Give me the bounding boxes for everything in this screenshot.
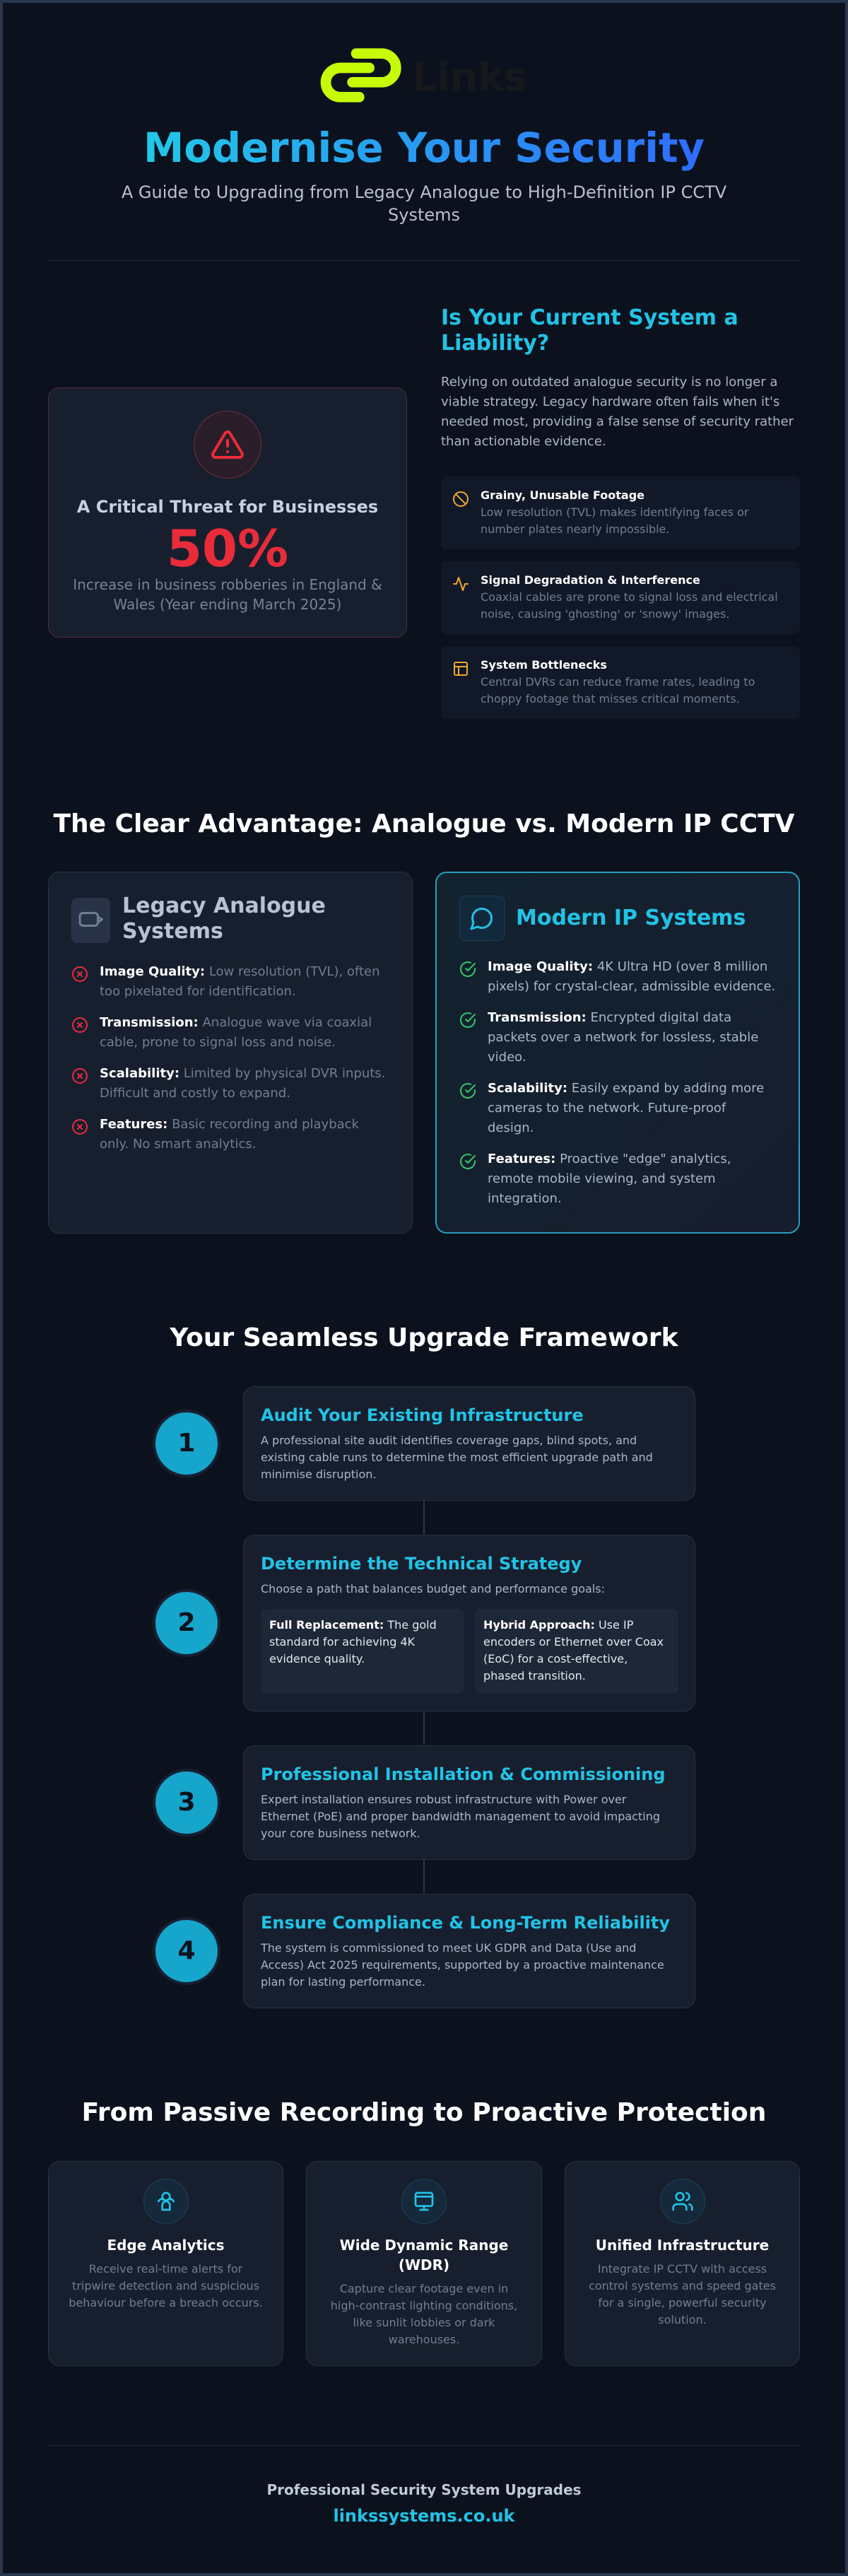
panel: unified infrastructure: control systems and speed gates: [589, 2279, 776, 2293]
option: hybrid approach: [475, 1609, 678, 1694]
panel: legacy analogue: [48, 872, 413, 1234]
title: Modernise Your Security: [143, 124, 705, 172]
panel: wide dynamic range: Wide Dynamic Range: [340, 2237, 508, 2254]
step 3 card: [243, 1745, 695, 1860]
panel: grainy footage: number plates nearly impossible.: [481, 522, 669, 536]
panel: signal degradation: noise, causing 'ghosting' or 'snowy' images.: [481, 607, 729, 621]
step 2 card: Determine the Technical Strategy: [261, 1554, 582, 1574]
step 1 card: minimise disruption.: [261, 1468, 376, 1481]
modern list: [459, 959, 775, 1206]
legacy list: too pixelated for identification.: [100, 984, 296, 999]
icon: modern camera: [459, 896, 505, 941]
step 3 card: Expert installation ensures robust infrastructure with Power over: [261, 1793, 626, 1806]
option: hybrid approach: encoders or Ethernet over Coax: [483, 1635, 664, 1649]
option: hybrid approach: (EoC) for a cost-effective,: [483, 1652, 628, 1665]
heading: liability: Liability?: [441, 331, 549, 356]
modern heading: Modern IP Systems: [516, 906, 746, 930]
panel: edge analytics: [48, 2161, 283, 2366]
modern list: Features: Proactive "edge" analytics,: [488, 1152, 731, 1166]
stat description: Increase in business robberies in England &: [73, 576, 382, 593]
panel: edge analytics: Edge Analytics: [107, 2237, 225, 2254]
panel: bottlenecks: Central DVRs can reduce frame rates, leading to: [481, 675, 755, 689]
step 4 number: 4: [177, 1936, 196, 1965]
option: full replacement: evidence quality.: [269, 1652, 365, 1665]
panel: unified infrastructure: solution.: [658, 2313, 707, 2326]
icon: chain link: [321, 48, 401, 103]
step 1 card: [243, 1386, 695, 1501]
logo: [321, 48, 401, 103]
logo wordmark: Links: [412, 54, 526, 100]
icon: ban: [453, 491, 469, 507]
step 2 number: 2: [177, 1608, 196, 1637]
panel: signal degradation: [441, 561, 800, 634]
step 2 number: [153, 1589, 220, 1657]
modern list: video.: [488, 1050, 526, 1065]
option: full replacement: standard for achieving 4K: [269, 1635, 415, 1649]
step 3 card: Professional Installation & Commissioning: [261, 1764, 666, 1784]
legacy list: Scalability: Limited by physical DVR inputs.: [100, 1066, 385, 1081]
icon: users: [660, 2179, 705, 2224]
panel: unified infrastructure: Integrate IP CCTV with access: [598, 2262, 767, 2276]
step 1 number: [153, 1410, 220, 1477]
heading: proactive protection: From Passive Recording to Proactive Protection: [82, 2098, 766, 2127]
subtitle: Systems: [388, 205, 460, 225]
text: liability intro: than actionable evidence.: [441, 434, 606, 449]
legacy list: Features: Basic recording and playback: [100, 1117, 359, 1132]
icon: legacy camera: [71, 898, 110, 943]
text: liability intro: Relying on outdated analogue security is no longer a: [441, 375, 777, 390]
modern list: packets over a network for lossless, stable: [488, 1030, 758, 1045]
step 4 card: [243, 1894, 695, 2008]
panel: unified infrastructure: Unified Infrastructure: [596, 2237, 769, 2254]
panel: wide dynamic range: like sunlit lobbies or dark: [353, 2316, 495, 2329]
step 1 number: 1: [177, 1429, 196, 1458]
step 4 card: Access) Act 2025 requirements, supported by a proactive maintenance: [261, 1958, 664, 1972]
legacy list: only. No smart analytics.: [100, 1137, 256, 1152]
modern list: integration.: [488, 1191, 562, 1206]
panel: signal degradation: Signal Degradation & Interference: [481, 573, 700, 587]
icon: layout: [454, 662, 468, 676]
panel: bottlenecks: choppy footage that misses critical moments.: [481, 692, 740, 706]
panel: wide dynamic range: [306, 2161, 542, 2366]
step 1 card: A professional site audit identifies coverage gaps, blind spots, and: [261, 1434, 637, 1447]
legacy list: Transmission: Analogue wave via coaxial: [100, 1015, 372, 1030]
panel: wide dynamic range: warehouses.: [389, 2333, 459, 2346]
icon: person: [143, 2179, 189, 2224]
step 3 number: [153, 1769, 220, 1837]
panel: modern IP: [435, 872, 800, 1234]
heading: clear advantage: The Clear Advantage: Analogue vs. Modern IP CCTV: [53, 809, 795, 838]
icon: activity: [453, 577, 469, 591]
heading: liability: Is Your Current System a: [441, 305, 738, 330]
footer tagline: Professional Security System Upgrades: [266, 2481, 582, 2498]
panel: critical threat stat: [48, 387, 407, 638]
modern list: Transmission: Encrypted digital data: [488, 1010, 731, 1025]
heading: upgrade framework: Your Seamless Upgrade Framework: [170, 1323, 678, 1352]
subtitle: [122, 182, 726, 225]
panel: grainy footage: Grainy, Unusable Footage: [481, 488, 644, 502]
legacy heading: Legacy Analogue: [122, 894, 326, 918]
modern list: cameras to the network. Future-proof: [488, 1101, 726, 1116]
subtitle: A Guide to Upgrading from Legacy Analogue to High-Definition IP CCTV: [122, 182, 726, 202]
panel: grainy footage: [441, 476, 800, 549]
step 2 card: [243, 1535, 695, 1711]
heading: liability: [441, 305, 738, 356]
legacy list: Image Quality: Low resolution (TVL), often: [100, 964, 379, 979]
legacy heading: [122, 894, 326, 944]
stat description: Wales (Year ending March 2025): [114, 596, 341, 613]
panel: unified infrastructure: [565, 2161, 800, 2366]
modern list: Scalability: Easily expand by adding more: [488, 1081, 764, 1096]
legacy list: Difficult and costly to expand.: [100, 1086, 290, 1101]
stat heading: A Critical Threat for Businesses: [77, 497, 378, 517]
panel: edge analytics: behaviour before a breach occurs.: [69, 2296, 263, 2309]
step 4 card: plan for lasting performance.: [261, 1975, 425, 1989]
option: full replacement: Full Replacement: The gold: [269, 1618, 437, 1632]
step 4 card: Ensure Compliance & Long-Term Reliability: [261, 1913, 670, 1933]
panel: edge analytics: Receive real-time alerts for: [89, 2262, 242, 2276]
modern list: design.: [488, 1120, 534, 1135]
step 3 number: 3: [177, 1788, 196, 1817]
panel: bottlenecks: System Bottlenecks: [481, 658, 607, 672]
step 1 card: Audit Your Existing Infrastructure: [261, 1405, 584, 1425]
legacy list: cable, prone to signal loss and noise.: [100, 1035, 336, 1050]
step 3 card: Ethernet (PoE) and proper bandwidth management to avoid impacting: [261, 1810, 660, 1823]
step 2 card: Choose a path that balances budget and performance goals:: [261, 1582, 605, 1596]
option: hybrid approach: Hybrid Approach: Use IP: [483, 1618, 633, 1632]
stat description: [73, 576, 382, 613]
modern list: pixels) for crystal-clear, admissible evidence.: [488, 979, 775, 994]
option: full replacement: [261, 1609, 464, 1694]
step 4 number: [153, 1917, 220, 1985]
step 3 card: your core business network.: [261, 1827, 420, 1840]
text: liability intro: needed most, providing a false sense of security rather: [441, 414, 794, 429]
icon: warning triangle: [194, 411, 261, 479]
panel: signal degradation: Coaxial cables are prone to signal loss and electrical: [481, 590, 778, 604]
step 1 card: existing cable runs to determine the most efficient upgrade path and: [261, 1451, 653, 1464]
stat value: 50%: [167, 519, 288, 578]
panel: grainy footage: Low resolution (TVL) makes identifying faces or: [481, 505, 748, 519]
modern list: remote mobile viewing, and system: [488, 1171, 716, 1186]
panel: wide dynamic range: (WDR): [399, 2256, 449, 2273]
step 4 card: The system is commissioned to meet UK GDPR and Data (Use and: [261, 1941, 636, 1955]
panel: unified infrastructure: for a single, powerful security: [598, 2296, 767, 2309]
legacy heading: Systems: [122, 919, 223, 944]
text: liability intro: [441, 375, 794, 449]
text: liability intro: viable strategy. Legacy hardware often fails when it's: [441, 394, 779, 409]
modern list: Image Quality: 4K Ultra HD (over 8 million: [488, 959, 767, 974]
panel: wide dynamic range: Capture clear footage even in: [340, 2282, 508, 2295]
panel: bottlenecks: [441, 646, 800, 719]
footer link: linkssystems.co.uk: [333, 2506, 515, 2526]
icon: monitor: [401, 2179, 447, 2224]
option: hybrid approach: phased transition.: [483, 1669, 586, 1682]
legacy list: [72, 964, 385, 1152]
panel: edge analytics: tripwire detection and suspicious: [72, 2279, 259, 2293]
panel: wide dynamic range: high-contrast lighting conditions,: [331, 2299, 517, 2312]
